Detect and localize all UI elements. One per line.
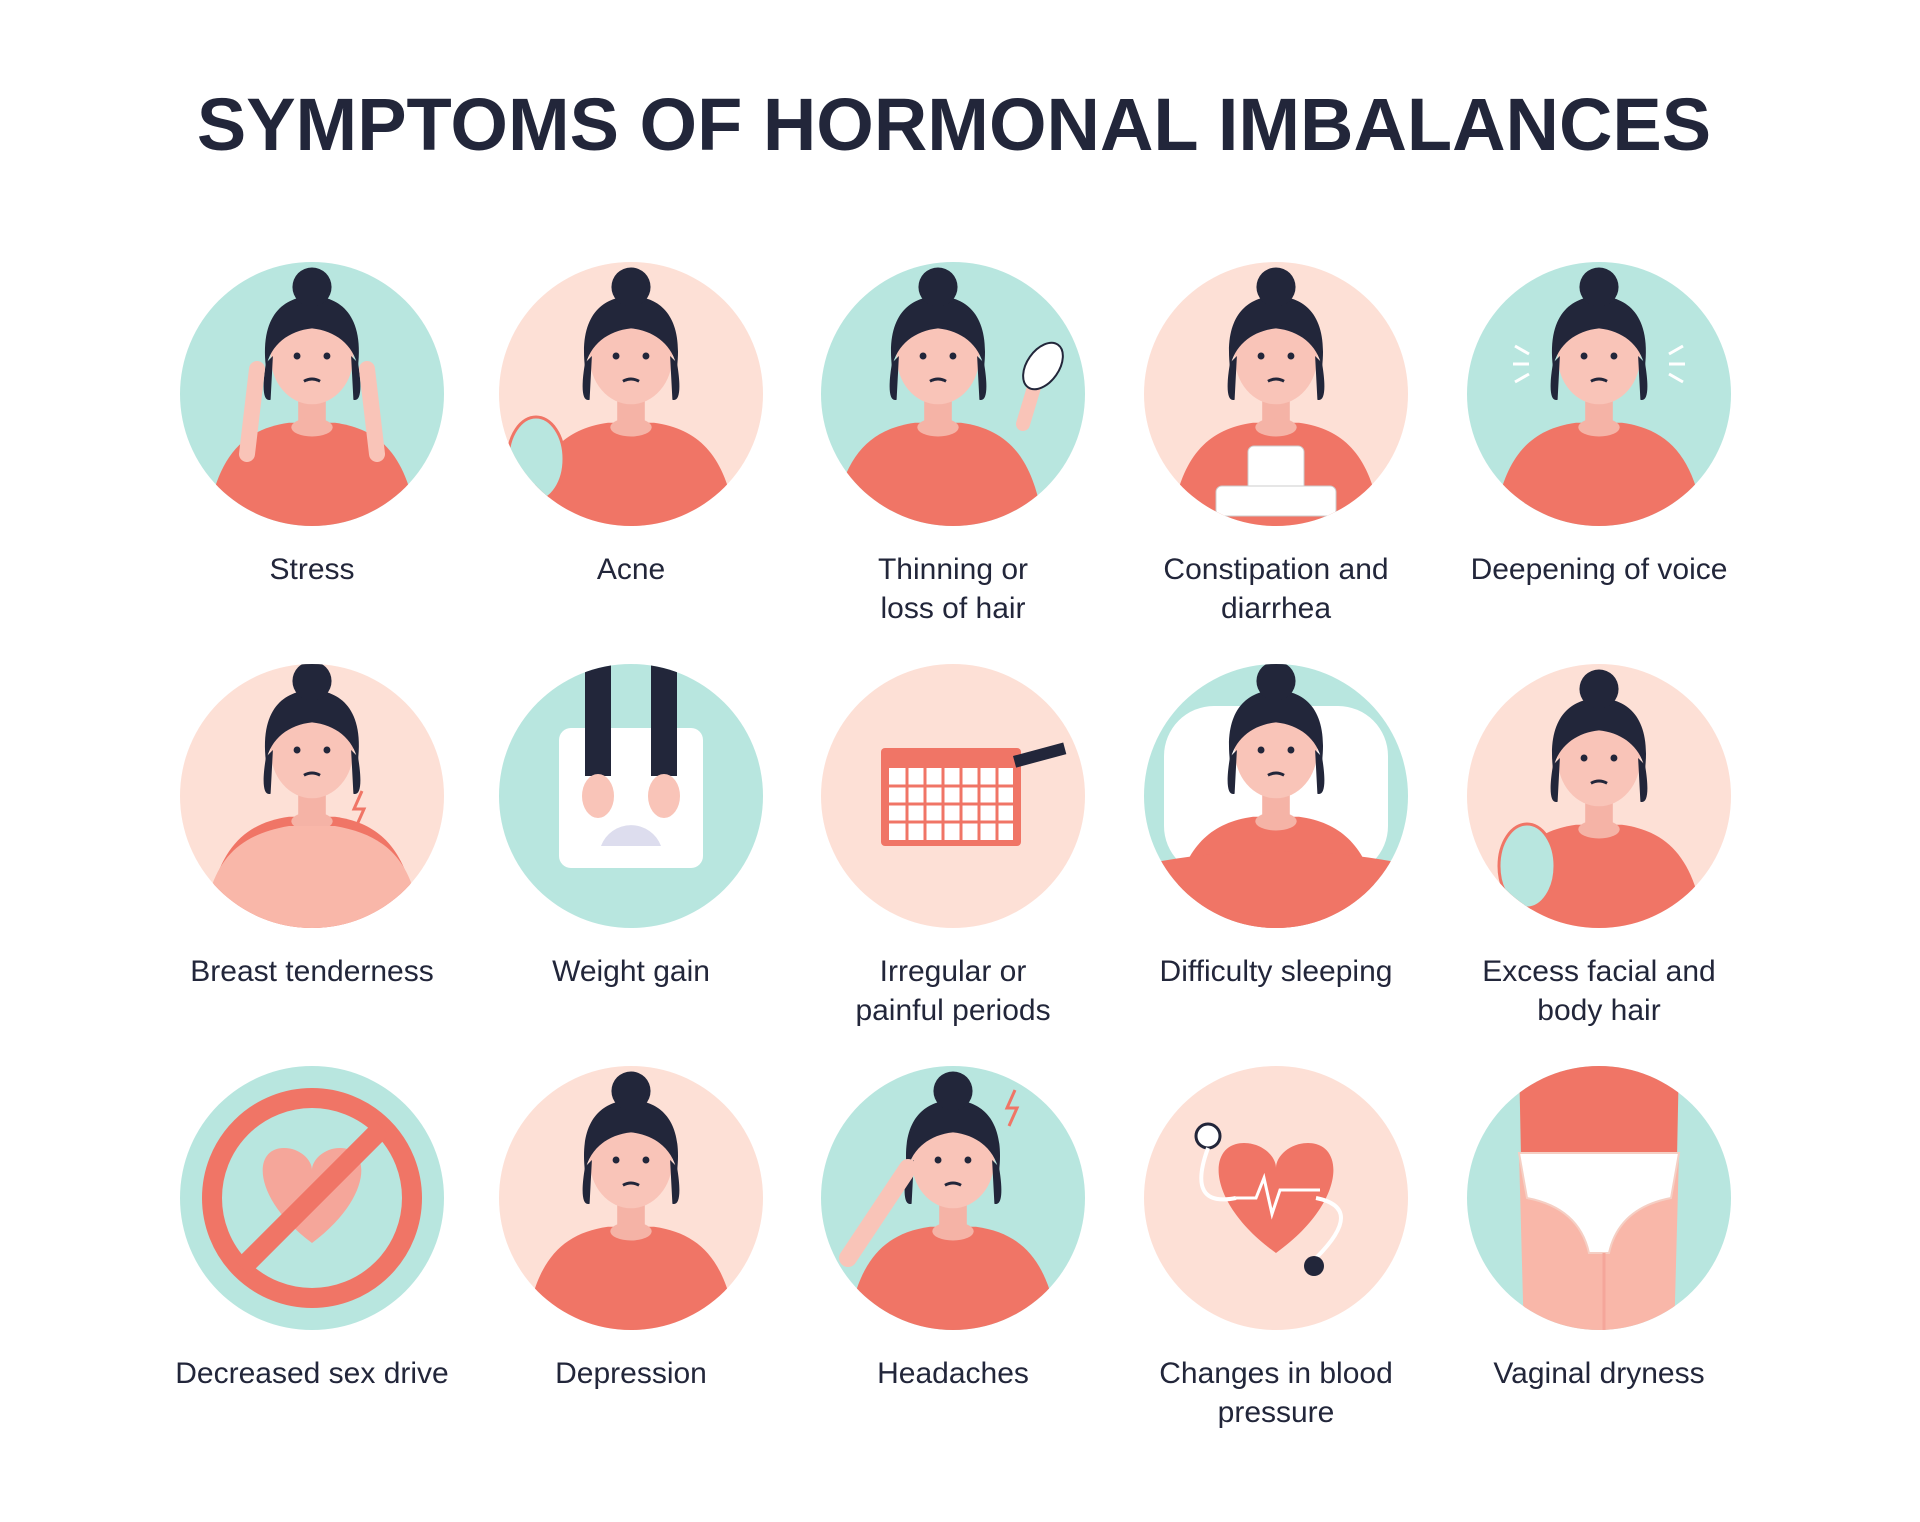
panel: sex drive [175, 1066, 449, 1390]
panel: facial hair: Excess facial and [1482, 955, 1716, 988]
panel: blood pressure [1144, 1066, 1408, 1429]
panel: voice [1467, 262, 1731, 586]
panel: blood pressure: pressure [1218, 1396, 1334, 1429]
panel: sex drive: Decreased sex drive [175, 1357, 449, 1390]
panel: acne: Acne [597, 553, 665, 586]
panel: hair loss [821, 262, 1085, 625]
panel: weight gain: Weight gain [552, 955, 710, 988]
panel: facial hair: body hair [1537, 994, 1661, 1027]
panel: blood pressure: Changes in blood [1159, 1357, 1393, 1390]
panel: periods [821, 664, 1085, 1027]
panel: vaginal dryness [1467, 1058, 1731, 1390]
panel: sleeping: Difficulty sleeping [1160, 955, 1392, 988]
title: SYMPTOMS OF HORMONAL IMBALANCES [197, 83, 1711, 166]
panel: hair loss: loss of hair [880, 592, 1026, 625]
panel: periods: painful periods [855, 994, 1051, 1027]
panel: depression: Depression [555, 1357, 707, 1390]
panel: weight gain [499, 646, 763, 988]
panel: vaginal dryness: Vaginal dryness [1493, 1357, 1705, 1390]
panel: sleeping [1136, 661, 1416, 988]
panel: stress [180, 262, 444, 586]
panel: periods: Irregular or [880, 955, 1026, 988]
panel: acne [499, 262, 763, 586]
panel: constipation [1144, 262, 1408, 625]
panel: hair loss: Thinning or [878, 553, 1028, 586]
panel: depression [499, 1066, 763, 1390]
panel: breast tenderness [180, 661, 444, 988]
panel: voice: Deepening of voice [1471, 553, 1727, 586]
panel: constipation: diarrhea [1221, 592, 1331, 625]
panel: stress: Stress [269, 553, 355, 586]
panel: headaches: Headaches [877, 1357, 1029, 1390]
panel: headaches [821, 1066, 1085, 1390]
panel: facial hair [1467, 664, 1731, 1027]
panel: constipation: Constipation and [1163, 553, 1389, 586]
panel: breast tenderness: Breast tenderness [190, 955, 434, 988]
